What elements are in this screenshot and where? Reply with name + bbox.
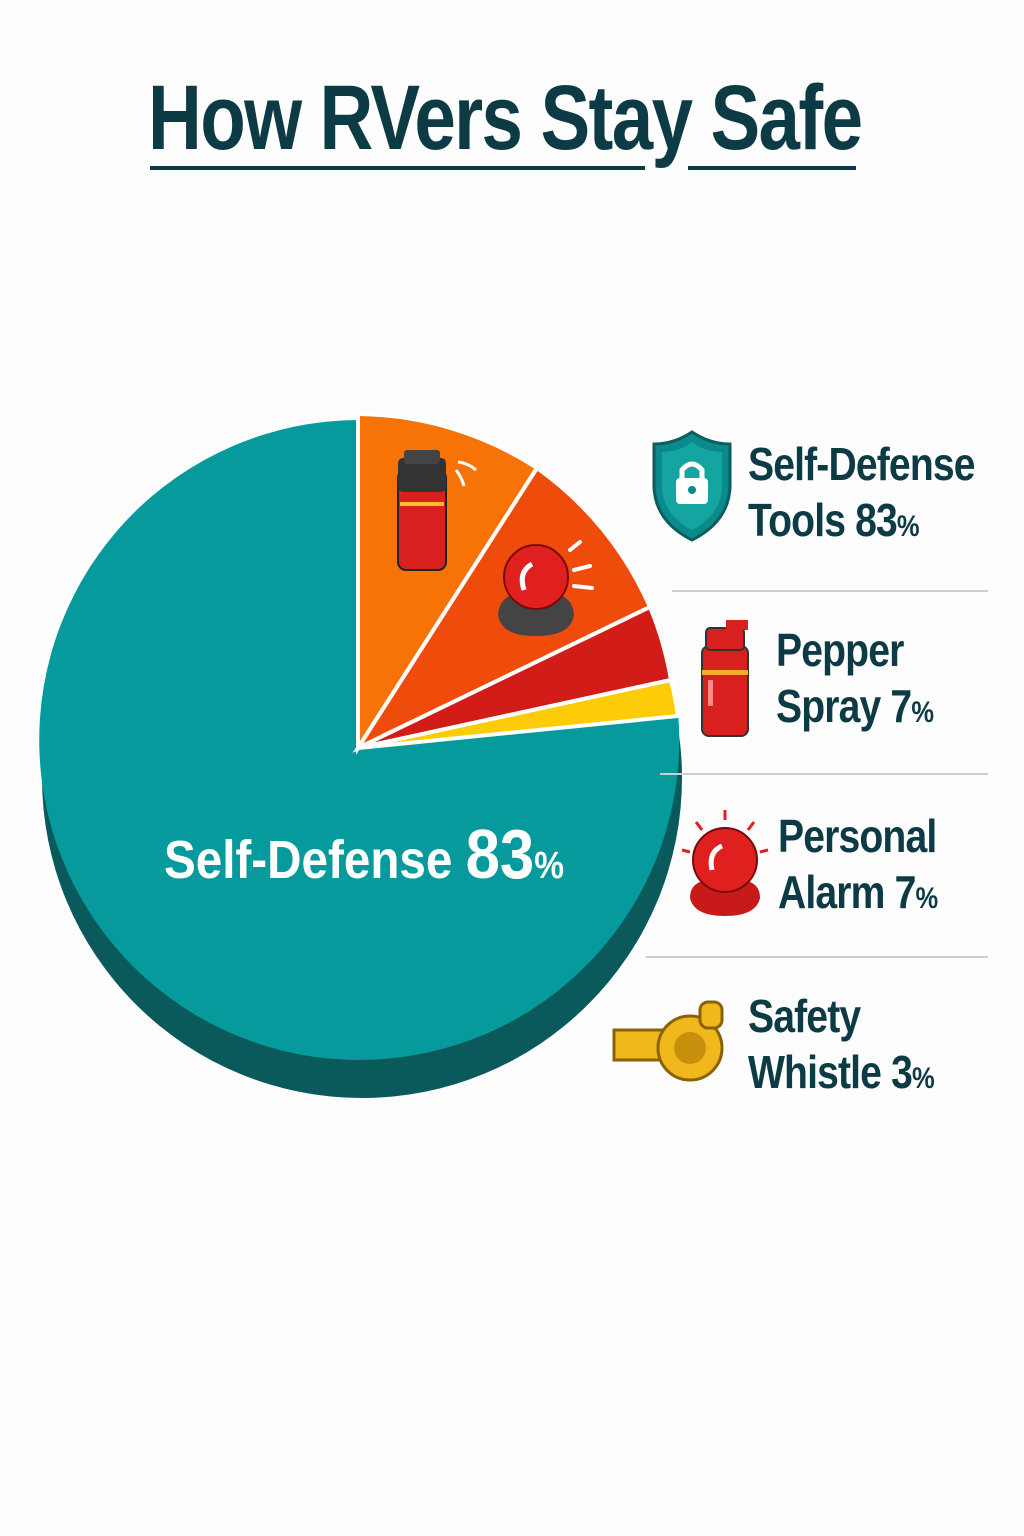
text: Self-Defense bbox=[748, 438, 975, 490]
text: Whistle 3% bbox=[748, 1046, 934, 1098]
title: How RVers Stay Safe bbox=[148, 67, 861, 169]
legend: personal alarm bbox=[682, 810, 938, 918]
icon: alarm bbox=[682, 810, 768, 916]
text bbox=[778, 810, 938, 918]
text bbox=[776, 624, 934, 732]
text: Personal bbox=[778, 810, 936, 862]
icon: alarm in pie bbox=[498, 542, 592, 636]
text: Safety bbox=[748, 990, 860, 1042]
legend: self-defense tools bbox=[652, 430, 975, 546]
legend: pepper spray bbox=[701, 620, 934, 737]
text bbox=[748, 990, 934, 1098]
label: self-defense in pie: Self-Defense 83% bbox=[164, 815, 564, 893]
icon: pepper spray in pie bbox=[398, 450, 476, 570]
text: Tools 83% bbox=[748, 494, 919, 546]
legend: safety whistle bbox=[612, 990, 934, 1098]
text bbox=[748, 438, 975, 546]
icon: pepper spray bbox=[701, 620, 749, 737]
text: Alarm 7% bbox=[778, 866, 937, 918]
icon: shield bbox=[652, 430, 732, 542]
text: Pepper bbox=[776, 624, 903, 676]
text: Spray 7% bbox=[776, 680, 933, 732]
icon: whistle bbox=[612, 1000, 724, 1082]
